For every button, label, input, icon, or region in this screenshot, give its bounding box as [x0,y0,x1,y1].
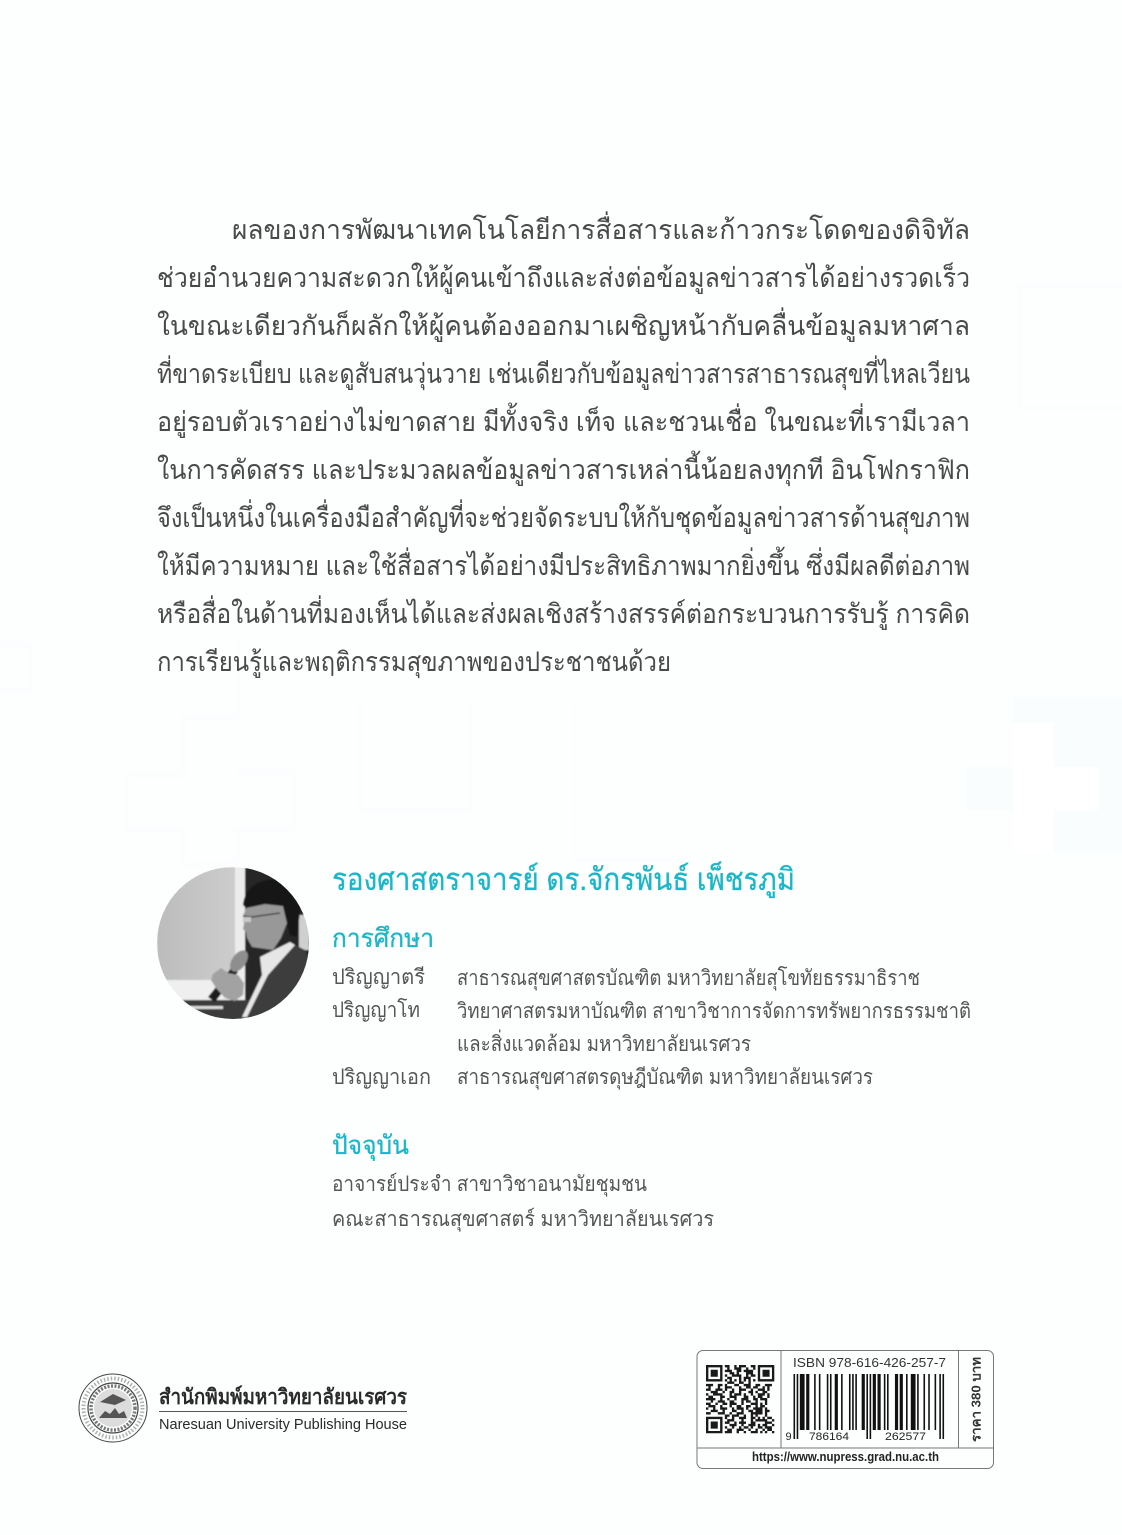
body paragraph: ในการคัดสรร และประมวลผลข้อมูลข่าวสารเหล่านี้น้อยลงทุกที อินโฟกราฟิก [157,450,970,487]
barcode [794,1374,944,1439]
education list: และสิ่งแวดล้อม มหาวิทยาลัยนเรศวร [457,1029,751,1056]
body paragraph: การเรียนรู้และพฤติกรรมสุขภาพของประชาชนด้วย [157,647,671,679]
current position text [332,1172,714,1232]
hair [243,880,300,937]
website url: https://www.nupress.grad.nu.ac.th [752,1450,939,1464]
ISBN number: ISBN 978-616-426-257-7 [793,1355,946,1370]
publisher name [159,1385,408,1433]
education list: ปริญญาเอก [332,1066,431,1089]
education list: วิทยาศาสตรมหาบัณฑิต สาขาวิชาการจัดการทรัพยากรธรรมชาติ [457,1000,971,1023]
body paragraph: ในขณะเดียวกันก็ผลักให้ผู้คนต้องออกมาเผชิญหน้ากับคลื่นข้อมูลมหาศาล [157,307,970,342]
body paragraph: ที่ขาดระเบียบ และดูสับสนวุ่นวาย เช่นเดียวกับข้อมูลข่าวสารสาธารณสุขที่ไหลเวียน [157,355,970,391]
body paragraph: อยู่รอบตัวเราอย่างไม่ขาดสาย มีทั้งจริง เท็จ และชวนเชื่อ ในขณะที่เรามีเวลา [157,402,970,438]
body paragraph [157,211,970,679]
barcode digits: 262577 [885,1431,926,1443]
body paragraph: ให้มีความหมาย และใช้สื่อสารได้อย่างมีประสิทธิภาพมากยิ่งขึ้น ซึ่งมีผลดีต่อภาพ [157,546,970,581]
suit [252,946,308,1016]
heading: current position: ปัจจุบัน [332,1130,409,1161]
face [243,904,287,950]
author name: รองศาสตราจารย์ ดร.จักรพันธ์ เพ็ชรภูมิ [332,861,795,898]
education list: สาธารณสุขศาสตรบัณฑิต มหาวิทยาลัยสุโขทัยธรรมาธิราช [457,966,920,991]
education list: ปริญญาตรี [332,966,425,989]
education list: สาธารณสุขศาสตรดุษฎีบัณฑิต มหาวิทยาลัยนเรศวร [457,1066,873,1090]
current position text: คณะสาธารณสุขศาสตร์ มหาวิทยาลัยนเรศวร [332,1207,714,1232]
body paragraph: หรือสื่อในด้านที่มองเห็นได้และส่งผลเชิงสร้างสรรค์ต่อกระบวนการรับรู้ การคิด [157,595,970,630]
education list: ปริญญาโท [332,998,420,1022]
body paragraph: ช่วยอำนวยความสะดวกให้ผู้คนเข้าถึงและส่งต่อข้อมูลข่าวสารได้อย่างรวดเร็ว [157,260,970,294]
ISBN label box [697,1350,994,1468]
icon: university seal [79,1374,147,1442]
barcode digits: 9 [786,1431,792,1443]
heading: education: การศึกษา [332,923,434,953]
price: ราคา 380 บาท [968,1357,984,1442]
current position text: อาจารย์ประจำ สาขาวิชาอนามัยชุมชน [332,1172,647,1197]
hand [211,968,244,1001]
QR code [706,1365,774,1433]
background ghost cross pattern [0,283,1122,865]
publisher name: Naresuan University Publishing House [159,1417,407,1433]
education list [332,966,971,1090]
glasses [243,913,280,917]
barcode digits: 786164 [809,1431,849,1443]
barcode digits [786,1431,926,1443]
body paragraph: ผลของการพัฒนาเทคโนโลยีการสื่อสารและก้าวกระโดดของดิจิทัล [232,211,970,245]
body paragraph: จึงเป็นหนึ่งในเครื่องมือสำคัญที่จะช่วยจัดระบบให้กับชุดข้อมูลข่าวสารด้านสุขภาพ [157,499,970,535]
author photo [157,867,315,1022]
publisher name: สำนักพิมพ์มหาวิทยาลัยนเรศวร [159,1385,408,1409]
microphone [208,967,238,1002]
white shirt [242,942,295,1017]
